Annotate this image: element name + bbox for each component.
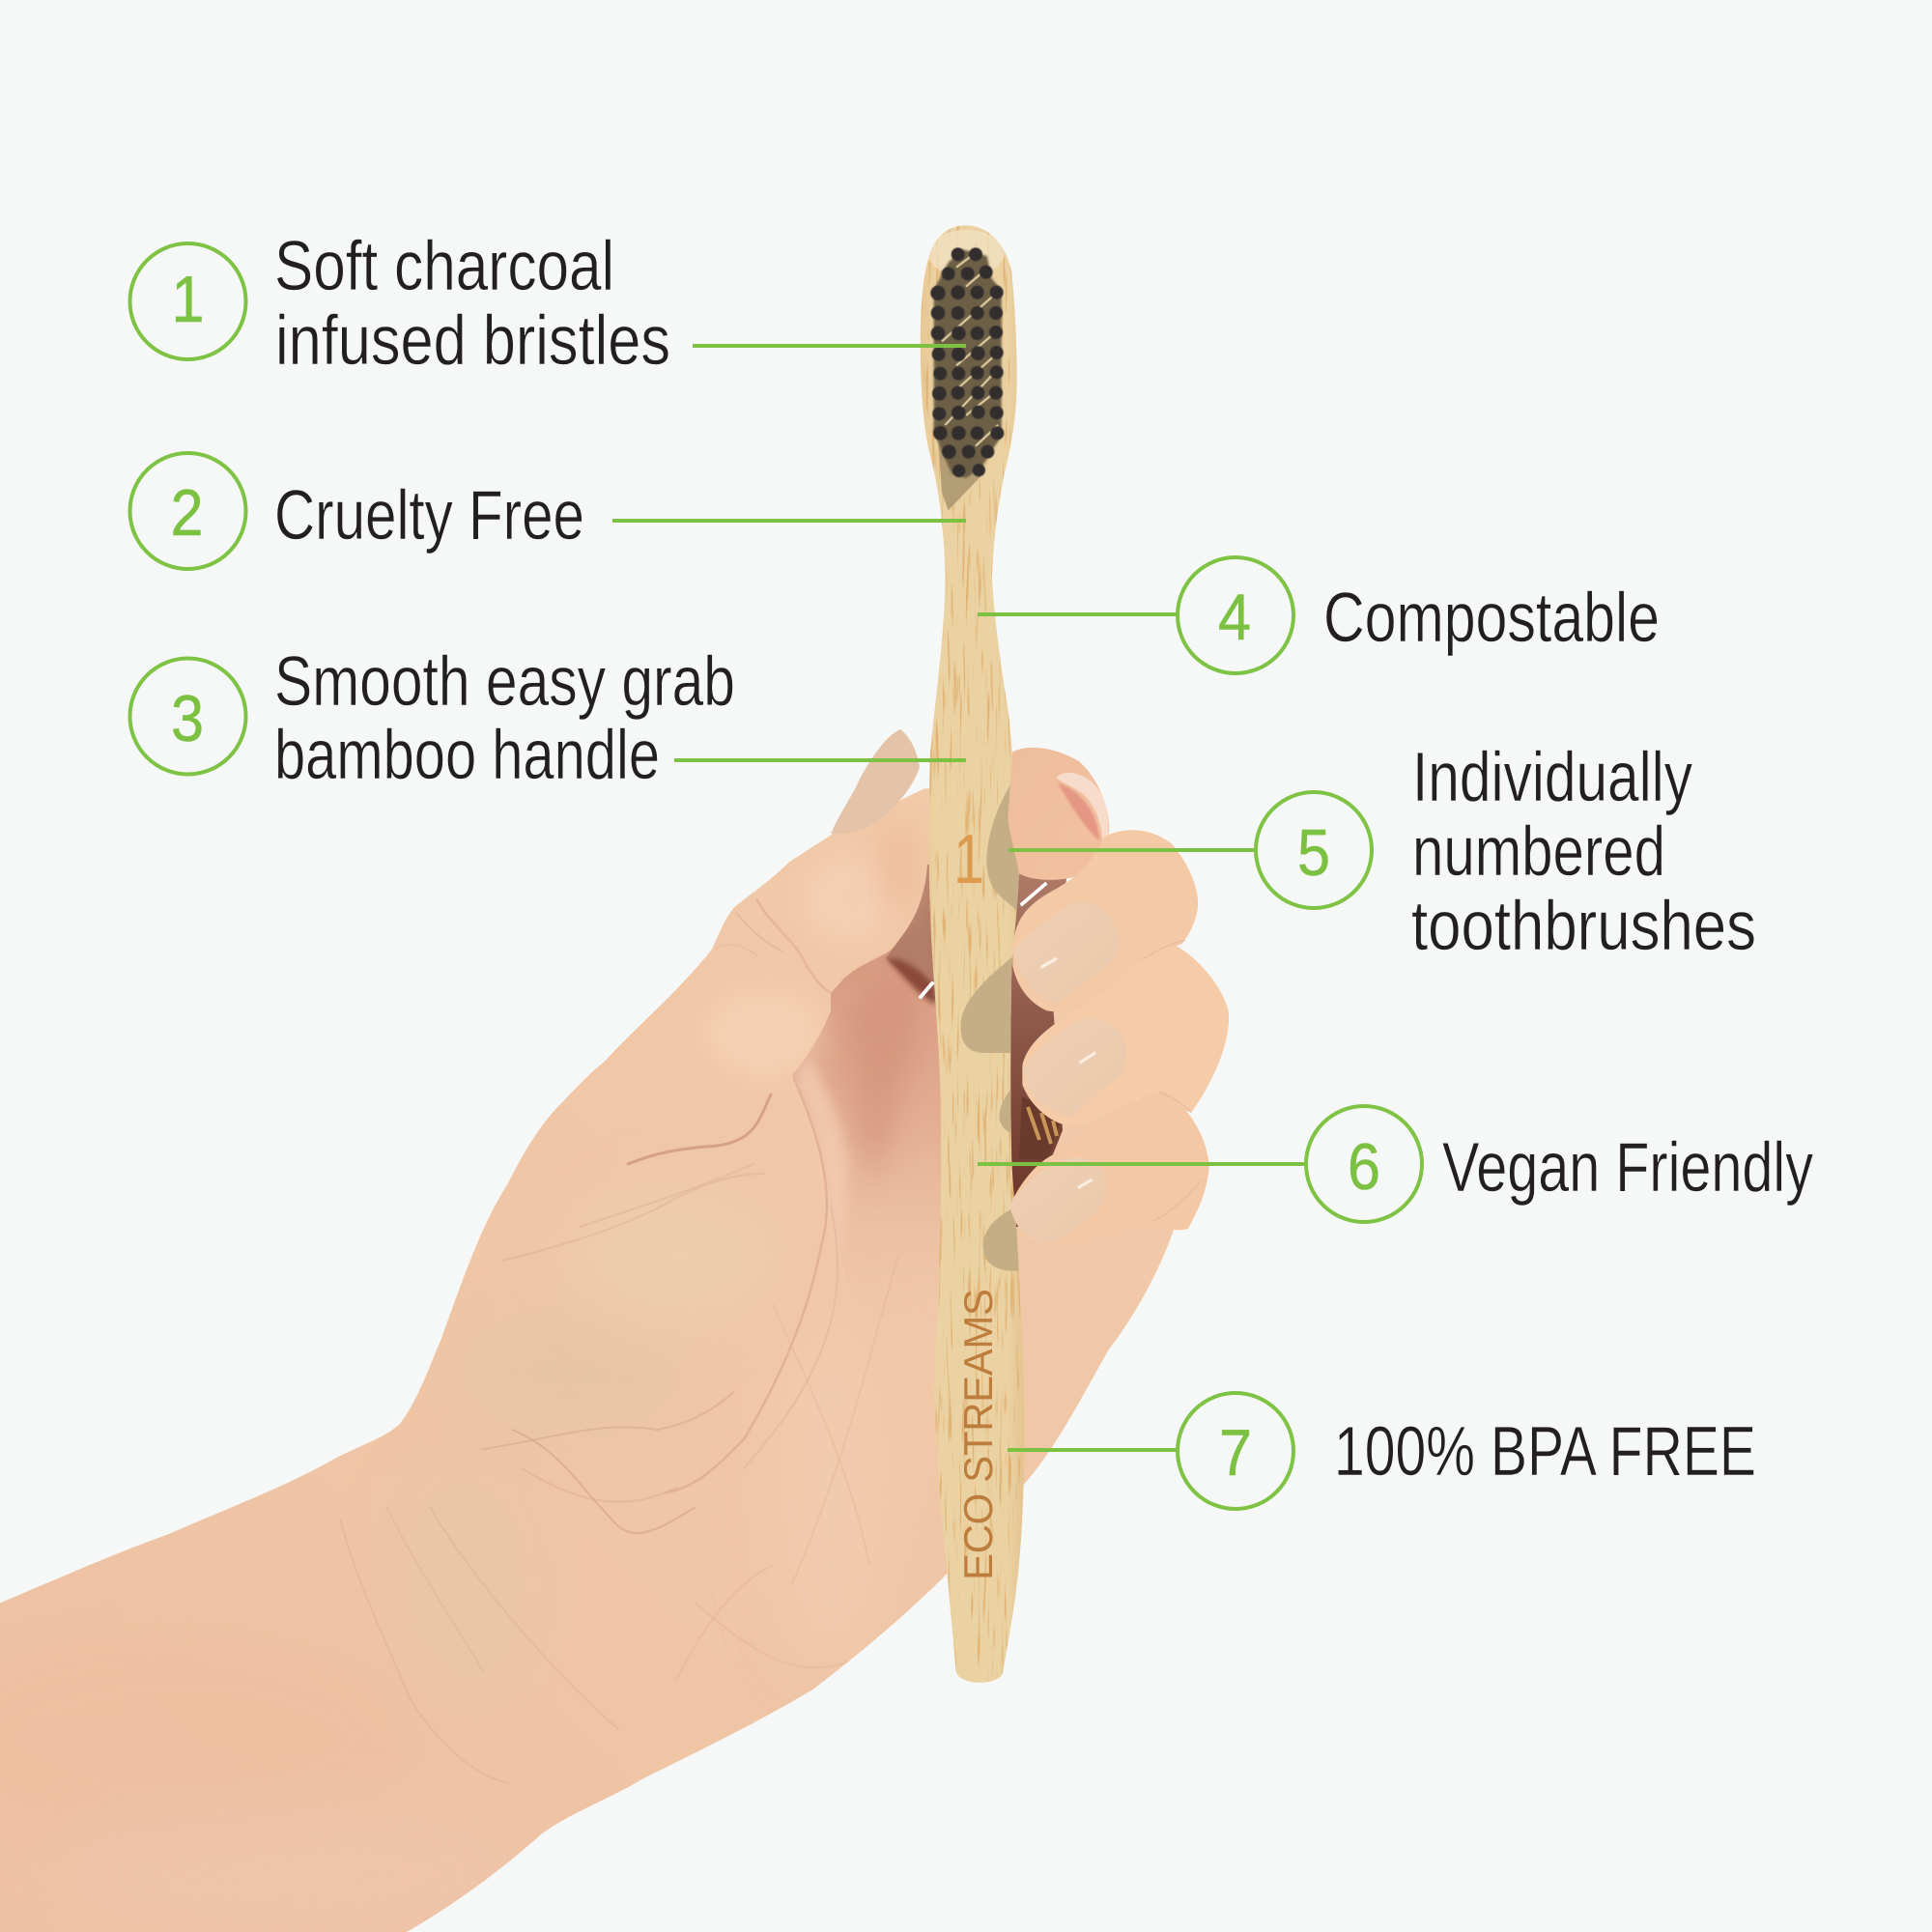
label 4: Compostable xyxy=(1323,580,1660,657)
cast shadows of fingers on the handle xyxy=(960,773,1024,1271)
badge 3 xyxy=(129,659,245,775)
deep gap behind fingers xyxy=(1005,869,1067,1227)
palm creases xyxy=(340,1079,898,1783)
label 6: Vegan Friendly xyxy=(1442,1129,1813,1207)
palm shading and creases xyxy=(0,821,942,1932)
label 3: bamboo handle xyxy=(274,717,660,794)
background sliver between fingers xyxy=(1021,883,1046,905)
badge 4: 4 xyxy=(1218,581,1251,654)
wood showing between bristle rows xyxy=(942,253,998,446)
line 6 xyxy=(978,1162,1306,1166)
label 5: numbered xyxy=(1412,813,1665,891)
arm and palm silhouette xyxy=(0,788,1177,1932)
hollow of palm under the thumb xyxy=(792,885,941,1227)
line 4 xyxy=(978,612,1177,616)
label 1: Soft charcoal xyxy=(274,228,614,305)
finger folds xyxy=(1143,940,1201,1221)
feature 3 xyxy=(129,643,735,794)
index nail bed xyxy=(1058,783,1099,840)
engraved number 1: 1 xyxy=(953,821,984,898)
callout lines xyxy=(612,344,1306,1452)
feature 4 xyxy=(1178,557,1660,673)
badge 3: 3 xyxy=(171,682,204,755)
ring finger xyxy=(1022,942,1229,1126)
label 1: infused bristles xyxy=(275,302,670,380)
nail 1 xyxy=(1012,902,1119,1004)
feature 7 xyxy=(1178,1393,1756,1509)
middle finger xyxy=(1012,830,1198,1011)
line 1 xyxy=(693,344,966,348)
badge 1: 1 xyxy=(172,263,205,336)
badge 6: 6 xyxy=(1348,1130,1380,1204)
bamboo toothbrush xyxy=(920,225,1024,1683)
badge 4 xyxy=(1178,557,1293,673)
label 5: toothbrushes xyxy=(1411,888,1756,965)
wood grain xyxy=(922,226,1022,1683)
label 3 xyxy=(274,643,735,794)
index nail edge xyxy=(1056,773,1109,842)
label 7: 100% BPA FREE xyxy=(1334,1413,1756,1491)
bristle shadow xyxy=(939,444,980,510)
feature 5 xyxy=(1256,739,1756,965)
badge 5: 5 xyxy=(1297,816,1330,890)
nail 3 xyxy=(1009,1157,1107,1243)
hand and arm photo illustration xyxy=(0,729,1177,1932)
line 5 xyxy=(1009,848,1256,852)
label 5: Individually xyxy=(1412,739,1692,816)
index finger xyxy=(1008,748,1109,880)
gold ring behind fingers xyxy=(1019,1096,1063,1159)
feature 6 xyxy=(1306,1106,1813,1222)
badge 5 xyxy=(1256,792,1372,908)
nail highlights xyxy=(1041,959,1094,1187)
bristles in head xyxy=(930,247,1004,510)
badge 7: 7 xyxy=(1219,1416,1252,1490)
bristle tufts xyxy=(930,247,1004,477)
line 7 xyxy=(1008,1448,1178,1452)
badge 2 xyxy=(129,453,245,569)
feature 2 xyxy=(129,453,584,569)
line 3 xyxy=(674,758,966,762)
badge 7 xyxy=(1178,1393,1293,1509)
engraved brand name: ECO STREAMS xyxy=(955,1289,1001,1580)
feature 1 xyxy=(129,228,670,380)
wooden body xyxy=(920,225,1024,1683)
label 5 xyxy=(1411,739,1756,965)
fingers and nails xyxy=(1008,748,1229,1244)
badge 6 xyxy=(1306,1106,1422,1222)
label 3: Smooth easy grab xyxy=(274,643,735,721)
thumb nail xyxy=(831,729,920,834)
background sliver under the thumb xyxy=(921,983,932,997)
line 2 xyxy=(612,519,966,523)
thumb highlights and knuckle crease xyxy=(705,821,920,1077)
nail 2 xyxy=(1022,1018,1126,1117)
label 2: Cruelty Free xyxy=(274,477,584,554)
badge 1 xyxy=(129,243,245,359)
label 1 xyxy=(274,228,670,380)
badge 2: 2 xyxy=(170,476,203,550)
little finger xyxy=(1009,1090,1209,1244)
